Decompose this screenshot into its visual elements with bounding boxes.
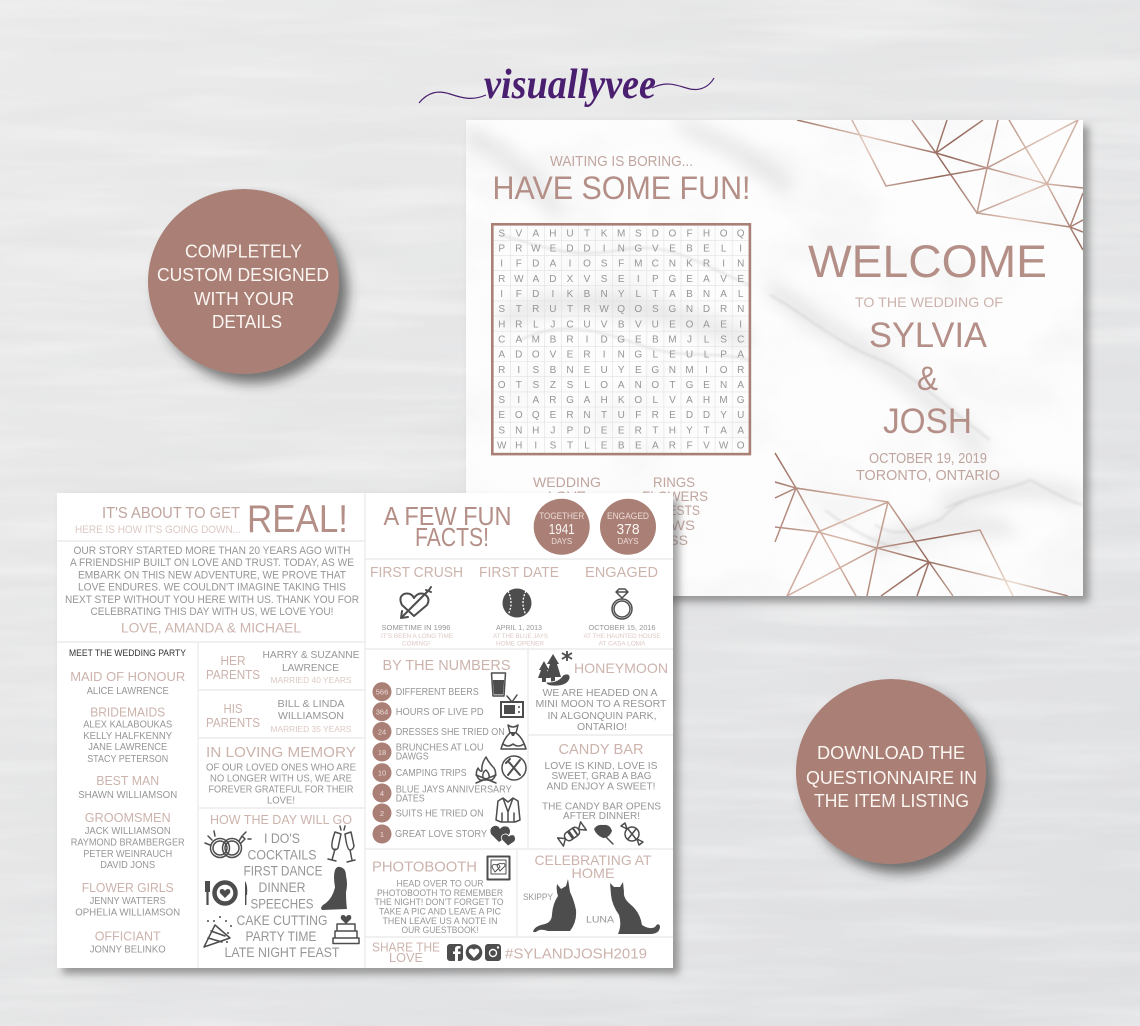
- story text: OUR STORY STARTED MORE THAN 20 YEARS AGO WITH: [74, 545, 351, 557]
- in loving memory: [206, 744, 356, 807]
- icon: instagram: [485, 944, 501, 961]
- a few fun facts heading: FACTS!: [415, 522, 489, 552]
- her parents: [206, 649, 360, 685]
- first date: APRIL 1, 2013: [496, 623, 542, 632]
- marble veining: [466, 120, 1083, 596]
- by the numbers: DIFFERENT BEERS: [396, 687, 479, 698]
- first crush: COMING!: [402, 641, 430, 648]
- by the numbers: 18: [378, 748, 386, 757]
- by the numbers: BY THE NUMBERS: [382, 657, 510, 674]
- photobooth: OUR GUESTBOOK!: [402, 925, 478, 935]
- callout: download questionnaire: DOWNLOAD THE: [817, 743, 965, 763]
- brand logo: visuallyvee: visuallyvee: [484, 62, 656, 108]
- photobooth: THEN LEAVE US A NOTE IN: [382, 916, 498, 926]
- celebrating at home: [523, 852, 660, 934]
- hashtag: #SYLANDJOSH2019: [505, 946, 647, 963]
- by the numbers: 2: [380, 809, 384, 818]
- icon: heart: [466, 944, 482, 961]
- couple names: SYLVIA: [869, 316, 988, 355]
- badge: together 1941 days: TOGETHER: [539, 511, 585, 521]
- first crush: [370, 564, 463, 648]
- word list: GUESTS: [650, 502, 700, 518]
- celebrating at home: LUNA: [586, 915, 615, 926]
- by the numbers: DRESSES SHE TRIED ON: [396, 727, 505, 738]
- wedding party list: RAYMOND BRAMBERGER: [71, 838, 185, 849]
- wedding party list: JENNY WATTERS: [90, 896, 166, 907]
- by the numbers: [372, 657, 526, 846]
- photobooth: HEAD OVER TO OUR: [396, 879, 484, 889]
- panel: welcome card (marble): [466, 120, 1083, 596]
- story text: NEXT STEP WITHOUT YOU HERE WITH US. THANK YOU FOR: [65, 594, 359, 606]
- date and location: [856, 450, 1000, 484]
- engaged: ENGAGED: [585, 564, 658, 581]
- word search heading: [492, 153, 750, 206]
- story text: A FRIENDSHIP BUILT ON LOVE AND TRUST. TODAY, AS WE: [70, 557, 354, 569]
- candy bar: THE CANDY BAR OPENS: [542, 800, 661, 812]
- icon: wedding cake: [333, 915, 359, 944]
- word search grid: CAMBRIDGEBMJLSC: [498, 334, 744, 345]
- candy bar: LOVE IS KIND, LOVE IS: [544, 760, 658, 772]
- share the love: LOVE: [389, 950, 423, 965]
- wedding party list: KELLY HALFKENNY: [83, 731, 173, 742]
- icon: plate with fork and knife: [502, 756, 526, 780]
- wedding party list: SHAWN WILLIAMSON: [78, 790, 177, 801]
- story text: EMBARK ON THIS NEW ADVENTURE, WE PROVE THAT: [78, 570, 346, 582]
- panel: program card: [57, 493, 673, 968]
- first crush: IT'S BEEN A LONG TIME: [381, 633, 454, 640]
- icon: champagne flutes: [328, 826, 355, 862]
- wedding party list: [69, 648, 187, 956]
- brand logo: visuallyvee: [419, 62, 714, 108]
- honeymoon: HONEYMOON: [574, 660, 668, 676]
- icon: television: [501, 695, 523, 717]
- date and location: TORONTO, ONTARIO: [856, 467, 1000, 484]
- wedding party list: JANE LAWRENCE: [88, 742, 167, 753]
- couple names: JOSH: [883, 402, 972, 441]
- her parents: PARENTS: [206, 667, 260, 682]
- word search heading: HAVE SOME FUN!: [492, 170, 750, 206]
- icon: bride and groom silhouette: [321, 867, 347, 910]
- wedding party list: STACY PETERSON: [87, 754, 168, 765]
- how the day will go: LATE NIGHT FEAST: [224, 945, 340, 960]
- callout: custom designed: COMPLETELY: [185, 242, 302, 262]
- wedding party list: PETER WEINRAUCH: [83, 849, 172, 860]
- by the numbers: HOURS OF LIVE PD: [396, 707, 484, 718]
- badge: engaged 378 days: [600, 499, 656, 555]
- a few fun facts heading: A FEW FUN: [384, 501, 512, 531]
- her parents: HER: [220, 653, 246, 668]
- word search heading: WAITING IS BORING...: [550, 153, 693, 170]
- callout: custom designed: WITH YOUR: [194, 289, 294, 309]
- photobooth: TAKE A PIC AND LEAVE A PIC: [379, 907, 501, 917]
- candy bar: SWEET, GRAB A BAG: [552, 770, 652, 782]
- photobooth: THE NIGHT! DON'T FORGET TO: [374, 897, 504, 907]
- story text: CELEBRATING THIS DAY WITH US, WE LOVE YOU!: [90, 606, 334, 618]
- honeymoon: IN ALGONQUIN PARK,: [548, 710, 656, 722]
- word search grid: WHISTLEBEARFVWO: [497, 441, 745, 452]
- how the day will go: CAKE CUTTING: [236, 913, 328, 928]
- celebrating at home: SKIPPY: [523, 892, 554, 903]
- how the day will go: I DO'S: [264, 831, 300, 846]
- wedding party list: ALICE LAWRENCE: [87, 686, 169, 697]
- first date: FIRST DATE: [479, 564, 559, 581]
- his parents: MARRIED 35 YEARS: [270, 724, 352, 734]
- wedding party list: FLOWER GIRLS: [82, 880, 174, 895]
- wedding party list: MAID OF HONOUR: [70, 669, 185, 684]
- celebrating at home: CELEBRATING AT: [534, 852, 652, 868]
- in loving memory: NO LONGER WITH US, WE ARE: [210, 774, 352, 785]
- story signature: LOVE, AMANDA & MICHAEL: [121, 620, 301, 636]
- callout: download questionnaire: [796, 679, 986, 864]
- word list: FLOWERS: [642, 488, 708, 504]
- badge: engaged 378 days: DAYS: [618, 536, 639, 546]
- icon: plate and cutlery: [205, 881, 247, 905]
- icon: party popper: [204, 916, 232, 947]
- heading: it's about to get real: HERE IS HOW IT'S GOING DOWN...: [75, 524, 241, 536]
- callout: custom designed: DETAILS: [212, 312, 282, 332]
- wedding party list: JONNY BELINKO: [90, 945, 166, 956]
- rose-gold geometric lines: top right: [797, 120, 1083, 250]
- a few fun facts heading: [384, 501, 512, 552]
- first date: AT THE BLUE JAYS: [493, 633, 549, 640]
- icon: wedding rings: [205, 831, 251, 858]
- engaged: OCTOBER 15, 2016: [588, 623, 656, 632]
- wedding party list: OPHELIA WILLIAMSON: [75, 908, 180, 919]
- word list: VOWS: [649, 517, 695, 533]
- welcome heading: WELCOME: [808, 236, 1047, 287]
- his parents: [206, 698, 352, 734]
- his parents: BILL & LINDA: [278, 698, 344, 710]
- first crush: SOMETIME IN 1996: [382, 623, 450, 632]
- first date: HOME OPENER: [496, 641, 544, 648]
- heading: it's about to get real: [75, 498, 348, 541]
- word search grid: IFDAIOSFMCNKRIN: [500, 259, 744, 270]
- word search grid: EOQERNTUFREDDYU: [498, 410, 744, 421]
- icon: trees, lake and snowflake: [538, 651, 572, 686]
- photobooth: [372, 856, 510, 935]
- badge: together 1941 days: [534, 499, 590, 555]
- in loving memory: FOREVER GRATEFUL FOR THEIR: [208, 785, 354, 796]
- photobooth: PHOTOBOOTH: [372, 860, 477, 876]
- icon: heart with arrow: [400, 587, 431, 618]
- welcome heading: [808, 236, 1047, 310]
- word search grid: RWADXVSEIPGEAVE: [498, 274, 744, 285]
- in loving memory: IN LOVING MEMORY: [206, 744, 356, 761]
- first crush: FIRST CRUSH: [370, 564, 463, 581]
- engaged: AT THE HAUNTED HOUSE: [584, 633, 661, 640]
- badge: together 1941 days: 1941: [549, 521, 575, 538]
- word search grid: HRLJCUVBVUEOAEI: [498, 319, 742, 330]
- candy bar: AFTER DINNER!: [563, 810, 640, 822]
- callout: custom designed: CUSTOM DESIGNED: [157, 265, 329, 285]
- word list: KISS: [656, 532, 688, 548]
- candy bar: CANDY BAR: [558, 742, 644, 758]
- icon: suit jacket: [496, 798, 520, 822]
- icon: beer glass: [492, 673, 506, 696]
- share the love: [372, 940, 647, 965]
- her parents: MARRIED 40 YEARS: [270, 675, 352, 685]
- word search grid: STRUTRWQOSGNDRN: [498, 304, 744, 315]
- callout: download questionnaire: THE ITEM LISTING: [814, 791, 969, 811]
- how the day will go: SPEECHES: [250, 897, 314, 912]
- icon: cat luna: [610, 882, 660, 934]
- celebrating at home: HOME: [572, 865, 614, 881]
- how the day will go: [210, 812, 352, 960]
- by the numbers: 1: [380, 830, 384, 839]
- icon: candies: [558, 822, 643, 846]
- word search grid: OTSZSLOANOTGENA: [498, 380, 744, 391]
- candy bar: AND ENJOY A SWEET!: [546, 780, 656, 792]
- honeymoon: [536, 651, 668, 733]
- word search grid: PRWEDDINGVEBELI: [498, 244, 742, 254]
- word list: [533, 474, 708, 548]
- how the day will go: DINNER: [258, 880, 306, 895]
- by the numbers: SUITS HE TRIED ON: [396, 809, 484, 820]
- wedding party list: BEST MAN: [96, 773, 159, 788]
- by the numbers: CAMPING TRIPS: [396, 768, 467, 779]
- her parents: LAWRENCE: [282, 662, 339, 674]
- in loving memory: LOVE!: [267, 796, 295, 807]
- by the numbers: 364: [376, 708, 388, 716]
- callout: download questionnaire: QUESTIONNAIRE IN: [806, 768, 977, 788]
- engaged: [584, 564, 661, 648]
- how the day will go: PARTY TIME: [246, 929, 316, 944]
- in loving memory: OF OUR LOVED ONES WHO ARE: [206, 763, 356, 774]
- word search grid: IFDIKBNYLTABNAL: [500, 289, 744, 300]
- photobooth: PHOTOBOOTH TO REMEMBER: [377, 888, 503, 898]
- badge: engaged 378 days: 378: [616, 521, 640, 538]
- icon: campfire: [476, 757, 496, 783]
- honeymoon: ONTARIO!: [577, 721, 627, 733]
- story text: [65, 545, 359, 618]
- how the day will go: FIRST DANCE: [244, 864, 322, 879]
- icon: facebook: [447, 944, 463, 961]
- wedding party list: GROOMSMEN: [85, 810, 171, 825]
- how the day will go: HOW THE DAY WILL GO: [210, 812, 352, 827]
- word list: LOVE: [548, 488, 586, 504]
- by the numbers: DAWGS: [396, 752, 429, 762]
- first date: [479, 564, 559, 648]
- story text: LOVE ENDURES. WE COULDN'T IMAGINE TAKING THIS: [78, 582, 346, 594]
- wedding party list: JACK WILLIAMSON: [85, 826, 171, 837]
- by the numbers: 566: [376, 688, 388, 696]
- his parents: WILLIAMSON: [278, 710, 344, 722]
- callout: custom designed: [148, 189, 339, 374]
- word search grid: SIARGAHKOLVAHMG: [498, 395, 745, 406]
- icon: two hearts: [490, 826, 516, 846]
- couple names: [869, 316, 988, 441]
- by the numbers: 10: [378, 768, 386, 778]
- icon: dress: [501, 725, 526, 749]
- icon: cat skippy: [533, 879, 576, 932]
- date and location: OCTOBER 19, 2019: [869, 450, 987, 467]
- by the numbers: BLUE JAYS ANNIVERSARY: [396, 785, 512, 796]
- rose-gold geometric lines: bottom left: [775, 453, 1068, 596]
- by the numbers: 4: [380, 789, 384, 798]
- honeymoon: MINI MOON TO A RESORT: [536, 698, 667, 710]
- wedding party list: DAVID JONS: [100, 860, 155, 871]
- word search grid: RISBNEUYEGNMIOR: [498, 365, 744, 376]
- icon: polaroid with hearts: [488, 856, 510, 880]
- word search grid: SNHJPDEERTHYTAA: [498, 425, 744, 436]
- his parents: PARENTS: [206, 715, 260, 730]
- couple names: &: [917, 360, 938, 398]
- wedding party list: OFFICIANT: [95, 929, 161, 944]
- icon: baseball: [502, 588, 532, 618]
- how the day will go: COCKTAILS: [248, 848, 316, 863]
- wedding party list: MEET THE WEDDING PARTY: [69, 648, 187, 659]
- word list: WEDDING: [533, 474, 601, 490]
- word search grid: ADOVERINGLEULPA: [498, 350, 744, 361]
- her parents: HARRY & SUZANNE: [262, 649, 360, 661]
- honeymoon: WE ARE HEADED ON A: [542, 687, 658, 699]
- word list: RINGS: [653, 474, 695, 490]
- word search grid: [492, 224, 750, 454]
- by the numbers: 24: [378, 727, 386, 736]
- his parents: HIS: [224, 701, 243, 716]
- by the numbers: DATES: [396, 794, 425, 804]
- wedding party list: ALEX KALABOUKAS: [83, 720, 172, 730]
- word search grid: SVAHUTKMSDOFHOQ: [498, 228, 745, 239]
- welcome heading: TO THE WEDDING OF: [855, 294, 1003, 310]
- by the numbers: GREAT LOVE STORY: [395, 829, 487, 840]
- number bullets: [372, 682, 392, 844]
- icon: engagement ring: [612, 589, 632, 619]
- badge: engaged 378 days: ENGAGED: [607, 511, 649, 521]
- engaged: AT CASA LOMA: [598, 641, 646, 648]
- share the love: SHARE THE: [372, 940, 440, 955]
- heading: it's about to get real: REAL!: [247, 498, 348, 541]
- by the numbers: BRUNCHES AT LOU: [396, 743, 484, 754]
- badge: together 1941 days: DAYS: [551, 536, 572, 546]
- candy bar: [542, 742, 661, 846]
- wedding party list: BRIDEMAIDS: [90, 705, 166, 720]
- heading: it's about to get real: IT'S ABOUT TO GET: [102, 505, 240, 522]
